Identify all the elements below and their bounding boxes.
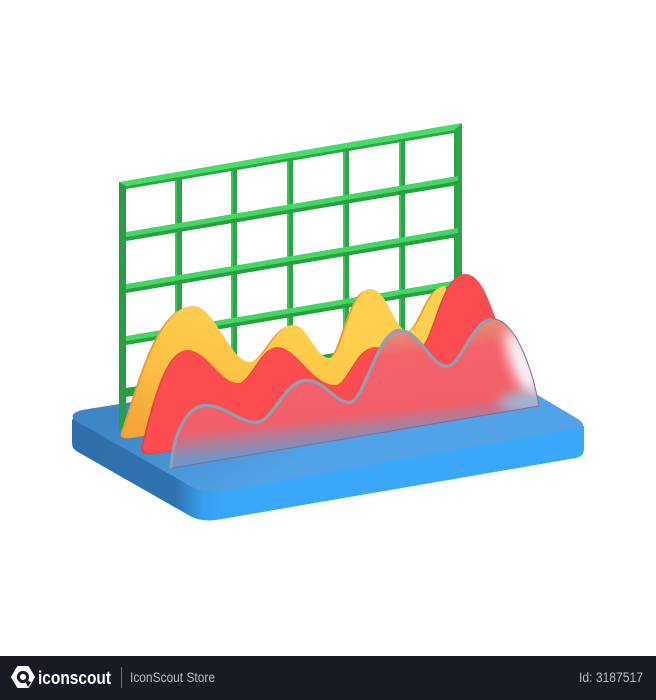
asset id: Id: 3187517 [579,670,643,685]
platform base [72,349,584,520]
yellow area wave [120,286,470,438]
footer divider [121,667,122,688]
red area wave [141,274,497,454]
frosted glass area wave [171,319,551,468]
green grid wall [119,123,462,430]
store name: IconScout Store [130,670,215,685]
iconscout logo icon [12,667,34,687]
footer bar [0,656,656,700]
brand name: iconscout [38,667,111,688]
